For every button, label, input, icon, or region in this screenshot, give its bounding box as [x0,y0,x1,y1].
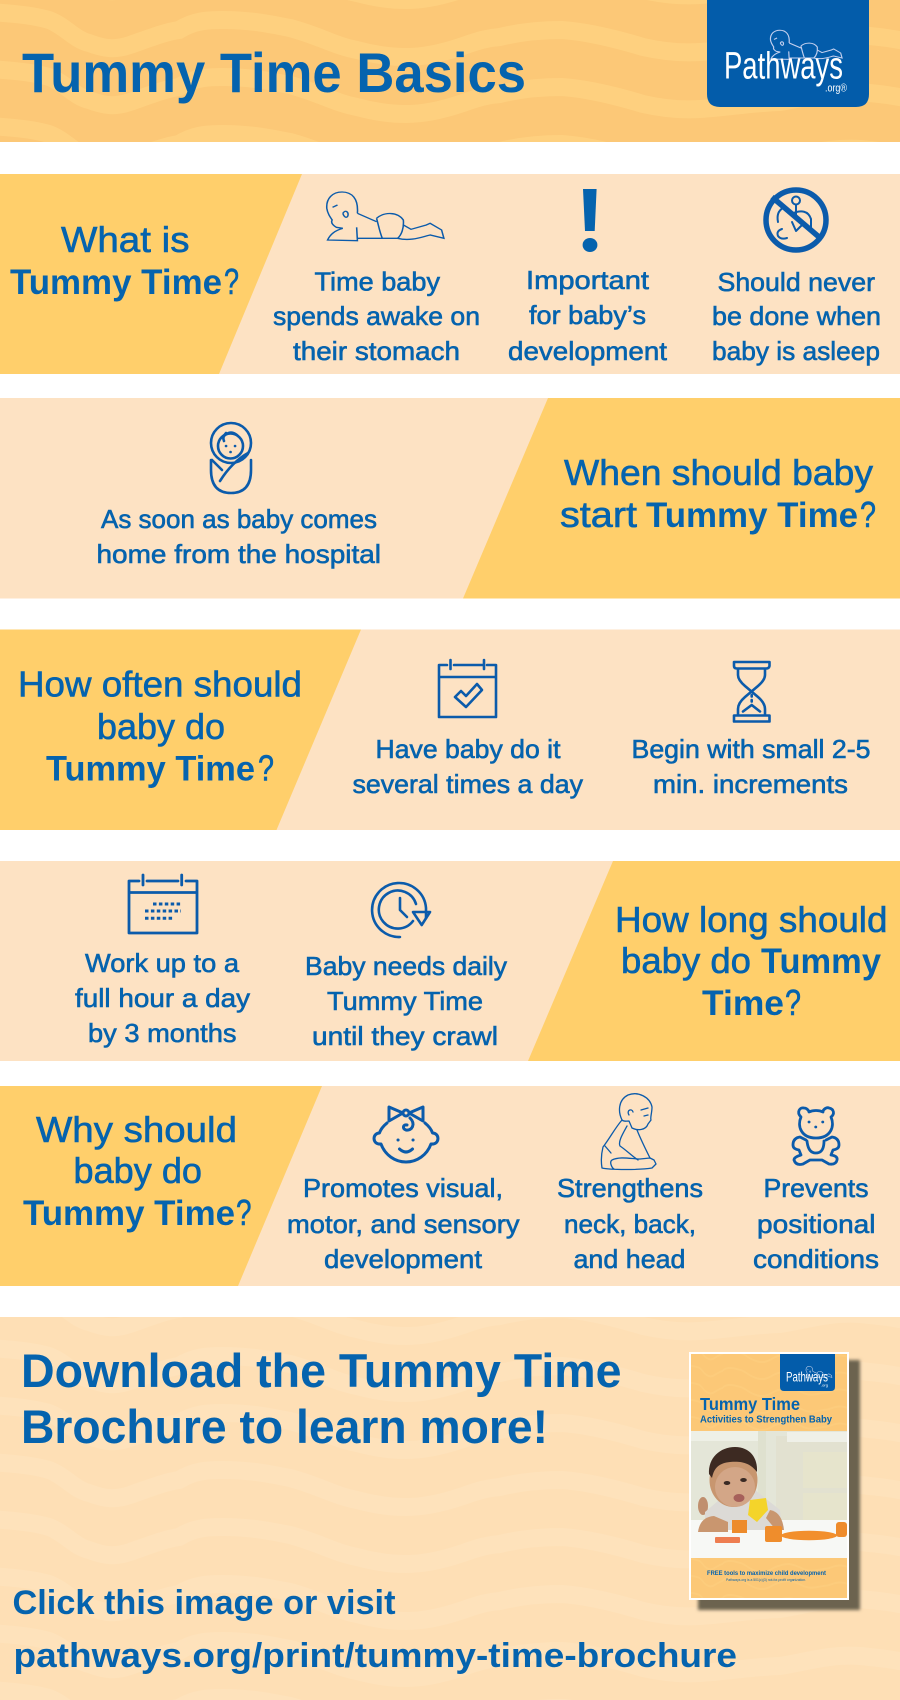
heading: how long: How long should [615,899,888,940]
text: promotes development: development [324,1244,483,1274]
panel: what is tummy time [0,174,900,374]
text: work up to a full hour: full hour a day [75,983,250,1013]
text: work up to a full hour: by 3 months [88,1018,236,1048]
panel: when should baby start [0,398,900,598]
heading: when should baby start: ? [860,494,876,535]
heading: how often: ? [258,748,274,789]
text: strengthens neck: Strengthens [557,1173,703,1203]
text: prevents conditions: Prevents [764,1173,868,1203]
heading: how long: Time [702,984,784,1023]
brochure logo: Pathways [786,1369,828,1385]
brochure title [700,1394,832,1426]
text: promotes development: motor, and sensory [287,1209,520,1239]
icon: baby lying on stomach [327,192,444,241]
brochure logo [780,1354,835,1391]
text: daily until crawl: until they crawl [312,1021,498,1051]
text: strengthens neck: and head [574,1244,686,1274]
text: promotes development: Promotes visual, [303,1173,503,1203]
logo: Pathways.org: .org® [825,82,847,94]
heading: how often: Tummy Time [46,750,255,789]
heading: why [23,1109,252,1233]
text: as soon as baby comes home [96,504,381,569]
brochure tagline [707,1570,827,1582]
text: daily until crawl [305,951,507,1051]
text: work up to a full hour: Work up to a [85,948,240,978]
text: click or visit url [12,1584,737,1675]
brochure photo: baby playing [691,1431,847,1558]
text: strengthens neck [557,1173,703,1274]
text: time baby spends awake: spends awake on [273,301,480,331]
panel: why [0,1086,900,1286]
text: promotes development [287,1173,520,1274]
text: as soon as baby comes home: home from the hospital [96,539,381,569]
heading: why: Tummy Time [23,1194,235,1233]
heading: what is tummy time: ? [224,261,239,302]
heading: how often: How often should [18,664,302,705]
panel: how long [0,861,900,1061]
text: important for development: Important [526,265,650,295]
text: prevents conditions [753,1173,879,1274]
panel: how often [0,630,900,830]
heading: how long: ? [785,982,801,1023]
logo: Pathways.org [707,0,869,107]
header banner [0,0,900,142]
text: never when asleep: baby is asleep [712,336,880,366]
brochure cover [689,1349,860,1610]
panel: download footer [0,1291,900,1700]
title: Tummy Time Basics [22,41,526,104]
heading: what is tummy time: What is [61,219,190,260]
icon: teddy bear [793,1108,839,1164]
icon: clock with arrow [372,883,430,937]
brochure title: Tummy Time [700,1394,800,1414]
heading: why: ? [236,1192,252,1233]
text: prevents conditions: positional [757,1209,876,1239]
text: important for development: development [508,336,668,366]
brochure tagline: Pathways.org is a 501(c)(3) not-for-profit organization. [726,1578,806,1582]
text: time baby spends awake [273,266,480,366]
icon: exclamation mark [583,189,597,252]
text: daily until crawl: Tummy Time [327,986,483,1016]
text: never when asleep [712,267,881,366]
text: prevents conditions: conditions [753,1244,879,1274]
heading: how long [615,899,888,1023]
heading: when should baby start: When should baby [564,452,873,493]
brochure tagline: FREE tools to maximize child development [707,1570,827,1577]
heading: when should baby start: Tummy Time [646,496,858,535]
text: never when asleep: Should never [718,267,875,297]
brochure logo: .org [821,1382,828,1388]
text: several times a day: several times a day [352,769,583,799]
heading: how long: baby do [621,940,751,981]
icon: hourglass [734,662,770,722]
icon: no sleeping baby mobile [766,190,826,250]
text: begin small increments [632,734,870,799]
text: never when asleep: be done when [712,301,881,331]
text: daily until crawl: Baby needs daily [305,951,507,981]
brochure title: Activities to Strengthen Baby [700,1415,832,1426]
heading: download the brochure: Brochure to learn more! [21,1400,548,1453]
heading: what is tummy time: Tummy Time [10,263,222,302]
heading: when should baby start: start [560,494,637,535]
icon: baby girl with bow [374,1107,438,1162]
heading: how often [18,664,302,789]
icon: sitting baby [601,1094,656,1170]
text: strengthens neck: neck, back, [564,1209,696,1239]
text: time baby spends awake: Time baby [314,266,440,296]
text: begin small increments: min. increments [653,769,848,799]
icon: calendar with check [439,660,496,717]
text: important for development: for baby’s [529,300,646,330]
text: important for development [508,265,668,366]
text: click or visit url: Click this image or visit [12,1584,396,1622]
heading: download the brochure: Download the Tummy Time [21,1344,622,1397]
heading: how often: baby do [97,706,225,747]
heading: why: baby do [74,1150,202,1191]
text: begin small increments: Begin with small 2-5 [632,734,870,764]
text: several times a day [352,734,583,799]
heading: what is tummy time [10,219,239,302]
logo: Pathways.org: Pathways [724,46,843,88]
heading: how long: Tummy [761,942,882,981]
icon: swaddled baby [211,423,251,493]
heading: download the brochure [21,1344,622,1453]
text: several times a day: Have baby do it [376,734,561,764]
text: time baby spends awake: their stomach [293,336,460,366]
heading: why: Why should [36,1109,237,1150]
text: work up to a full hour [75,948,250,1048]
text: as soon as baby comes home: As soon as baby comes [101,504,377,534]
heading: when should baby start [560,452,876,535]
text: click or visit url: pathways.org/print/tummy-time-brochure [14,1637,737,1675]
icon: calendar [129,875,197,933]
